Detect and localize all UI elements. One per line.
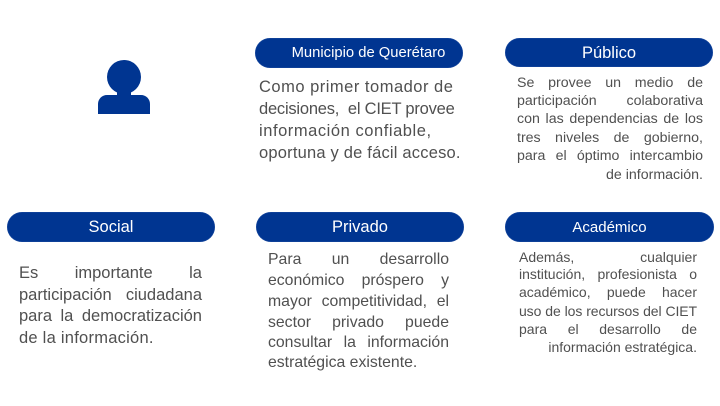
text: Municipio de Querétaro: decisiones, el CIET provee (259, 100, 455, 118)
text: Público: Se provee un medio de (517, 75, 703, 91)
text: Público: de información. (606, 167, 703, 183)
heading: Público (505, 38, 713, 67)
text: Privado: estratégica existente. (268, 354, 417, 371)
text: Académico: uso de los recursos del CIET (519, 303, 697, 319)
text: Académico: institución, profesionista o (519, 266, 697, 282)
text: Público: para el óptimo intercambio (517, 148, 703, 164)
heading: Social (7, 212, 215, 242)
heading: Público: Público (582, 44, 636, 62)
text: Municipio de Querétaro: oportuna y de fácil acceso. (259, 144, 461, 162)
heading: Municipio de Querétaro: Municipio de Querétaro (292, 45, 445, 61)
text: Municipio de Querétaro: información confiable, (259, 122, 432, 140)
text: Privado: económico próspero y (268, 272, 449, 289)
text: Público: tres niveles de gobierno, (517, 130, 703, 146)
text: Municipio de Querétaro (259, 78, 461, 162)
text: Privado: consultar la información (268, 334, 449, 351)
text: Privado: Para un desarrollo (268, 251, 449, 268)
heading: Privado (256, 212, 464, 242)
text: Municipio de Querétaro: Como primer tomador de (259, 78, 453, 96)
heading: Académico (505, 212, 714, 242)
text: Académico: información estratégica. (548, 339, 697, 355)
text: Académico: Además, cualquier (519, 249, 697, 265)
text: Privado: mayor competitividad, el (268, 293, 449, 310)
text: Privado (268, 251, 449, 371)
text: Privado: sector privado puede (268, 314, 449, 331)
text: Público (517, 75, 703, 183)
heading: Municipio de Querétaro (255, 38, 463, 68)
heading: Social: Social (89, 218, 133, 236)
text: Social: de la información. (19, 329, 154, 347)
text: Social (19, 264, 202, 347)
text: Académico (519, 249, 697, 355)
heading: Académico: Académico (572, 219, 647, 236)
text: Público: con las dependencias de los (517, 111, 703, 127)
text: Académico: para el desarrollo de (519, 321, 697, 337)
text: Social: para la democratización (19, 307, 202, 325)
text: Público: participación colaborativa (517, 93, 703, 109)
heading: Privado: Privado (332, 218, 388, 236)
text: Académico: académico, puede hacer (519, 284, 697, 300)
text: Social: participación ciudadana (19, 286, 202, 304)
icon: person silhouette (98, 60, 150, 114)
text: Social: Es importante la (19, 264, 202, 282)
